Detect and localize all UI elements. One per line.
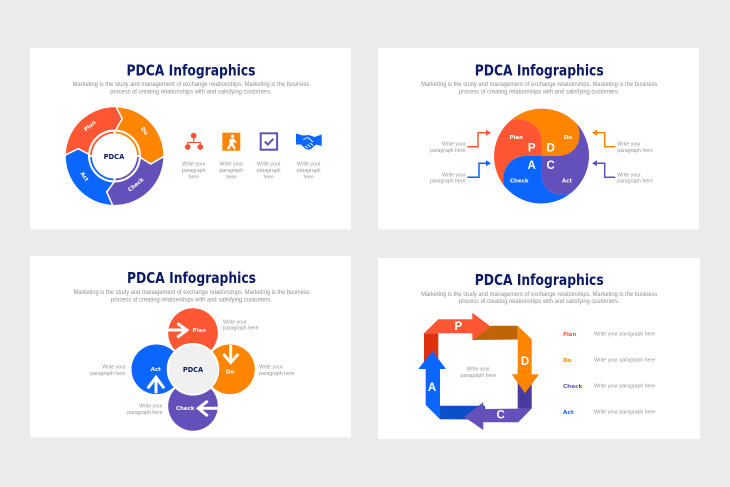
circle: Plan (168, 308, 218, 358)
arrow: red (467, 130, 491, 147)
hub label: PDCA (104, 153, 125, 161)
label: Do: Do (226, 370, 234, 376)
label: Do: Do (139, 126, 149, 137)
heading: PDCA Infographics (127, 269, 256, 287)
callout: bottom right: Write your (617, 172, 641, 178)
caption: icon 3: paragraph (257, 168, 281, 174)
legend: Plan (563, 332, 655, 338)
circle: Act (132, 344, 181, 394)
segment: Plan (65, 106, 122, 156)
description text: process of creating relationships with and satisfying customers. (110, 88, 272, 95)
center hub (88, 130, 141, 182)
letters: A (528, 160, 536, 172)
caption: icon 4: paragraph (297, 168, 321, 174)
caption: icon 4: here (304, 175, 314, 181)
labels: Do (564, 135, 572, 141)
circle: Do (205, 344, 255, 394)
circle diagram (132, 308, 255, 431)
swirl: orange (510, 109, 579, 156)
letter: D: D (521, 356, 529, 368)
panel: swirl circle (378, 48, 699, 230)
callout: top right: Write your (617, 142, 641, 148)
swirl: purple (542, 124, 589, 195)
arrow: P (424, 313, 491, 340)
panel: square arrow loop (378, 258, 700, 439)
description text: process of creating relationships with and satisfying customers. (111, 296, 272, 303)
label: center: PDCA (183, 366, 204, 374)
description text: process of creating relationships with and satisfying customers. (459, 88, 620, 95)
fold: red (424, 333, 438, 365)
swirl: blue (503, 156, 571, 203)
caption: icon 2: Write your (220, 162, 243, 168)
description text (421, 81, 657, 95)
segment: Act (65, 149, 115, 206)
description text: Marketing is the study and management of exchange relationships. Marketing is the business (421, 291, 657, 298)
callout: bottom left: paragraph here (430, 179, 466, 185)
legend: Check: Write your paragraph here (594, 384, 655, 390)
segment: Do (114, 106, 164, 164)
description text: Marketing is the study and management of exchange relationships. Marketing is the business (74, 289, 310, 296)
swirl chart (494, 109, 589, 203)
arrow: purple (592, 160, 615, 177)
callout: top left: Write your (442, 142, 466, 148)
letters (528, 142, 555, 172)
caption: icon 1: here (189, 175, 199, 181)
panel: overlapping circles (30, 256, 351, 438)
legend: Plan: Plan (563, 332, 576, 338)
center circle (168, 344, 218, 395)
callout: Do: paragraph here (259, 371, 295, 377)
legend: Plan: Write your paragraph here (594, 332, 655, 338)
arrow: D (512, 326, 539, 393)
legend: Act (563, 410, 655, 416)
legend: Act: Write your paragraph here (594, 410, 655, 416)
center caption: Write your (467, 366, 490, 372)
hub ring (91, 132, 138, 180)
label: Check: Check (176, 406, 195, 412)
arrow: Do (223, 345, 238, 362)
heading: PDCA Infographics (475, 61, 604, 79)
callout: top left: paragraph here (430, 148, 466, 154)
center caption: paragraph here (461, 373, 496, 379)
callout: bottom left: Write your (442, 172, 466, 178)
fold: brown (472, 326, 518, 340)
segment: Check (107, 156, 164, 206)
icon: checkbox (261, 133, 277, 150)
panel: cycle wheel with icons (30, 48, 351, 230)
caption: icon 3: here (264, 175, 274, 181)
callout: Check: paragraph here (127, 410, 163, 416)
labels: Check (510, 178, 529, 184)
description text (421, 291, 657, 305)
icon: walking person (222, 133, 240, 151)
arrow: Check (198, 401, 218, 416)
description text (73, 81, 309, 95)
label: Check: Check (127, 177, 146, 194)
caption: icon 3: Write your (257, 162, 281, 168)
legend: Do: Do (563, 358, 572, 364)
arrow: orange (592, 130, 615, 147)
label: Act: Act (78, 171, 89, 183)
arrow: Act (148, 377, 164, 393)
legend: Check: Check (563, 384, 583, 390)
heading: PDCA Infographics (126, 61, 256, 79)
circle: Check (168, 381, 218, 431)
fold: dark blue (440, 406, 485, 420)
labels: Plan (510, 135, 523, 141)
legend: Do (563, 358, 655, 364)
label: Plan: Plan (83, 120, 98, 133)
caption: icon 1: Write your (182, 162, 206, 168)
letters: D (547, 142, 555, 154)
callout: Act: paragraph here (90, 371, 126, 377)
cycle wheel (65, 106, 164, 206)
callout: Plan: Write your (223, 319, 247, 325)
caption: icon 1: paragraph (182, 168, 206, 174)
caption: icon 2: here (226, 175, 237, 181)
icon: handshake (296, 134, 322, 150)
legend: Act: Act (563, 410, 574, 416)
description text: Marketing is the study and management of exchange relationships. Marketing is the business (73, 81, 309, 88)
caption: icon 2: paragraph (219, 168, 243, 174)
icon: hierarchy (185, 133, 203, 150)
caption: icon 4: Write your (297, 162, 321, 168)
callout: top right: paragraph here (617, 148, 653, 154)
legend: Do: Write your paragraph here (594, 358, 655, 364)
swirl: red (494, 119, 542, 185)
arrow: A (418, 351, 446, 419)
description text: process of creating relationships with and satisfying customers. (459, 298, 620, 305)
letters: C (547, 160, 555, 172)
callout: Check: Write your (139, 404, 163, 410)
arrow: blue (467, 160, 491, 177)
labels: Act (562, 178, 572, 184)
legend: Check (563, 384, 655, 390)
letters: P (528, 142, 536, 154)
callout: Do: Write your (259, 365, 283, 371)
description text (74, 289, 310, 303)
labels (510, 135, 572, 184)
callout: bottom right: paragraph here (617, 179, 653, 185)
arrow: C (464, 402, 532, 430)
letter: A: A (428, 382, 436, 394)
fold: dark purple (518, 380, 532, 408)
callout: Plan: paragraph here (223, 326, 259, 332)
arrow loop (418, 313, 539, 430)
callout: Act: Write your (102, 365, 126, 371)
description text: Marketing is the study and management of exchange relationships. Marketing is the business (421, 81, 657, 88)
heading: PDCA Infographics (475, 271, 604, 289)
label: Plan: Plan (193, 328, 206, 334)
letter: P: P (454, 321, 462, 333)
label: Act: Act (151, 367, 161, 373)
arrow: Plan (168, 323, 187, 337)
letter: C: C (497, 410, 505, 422)
